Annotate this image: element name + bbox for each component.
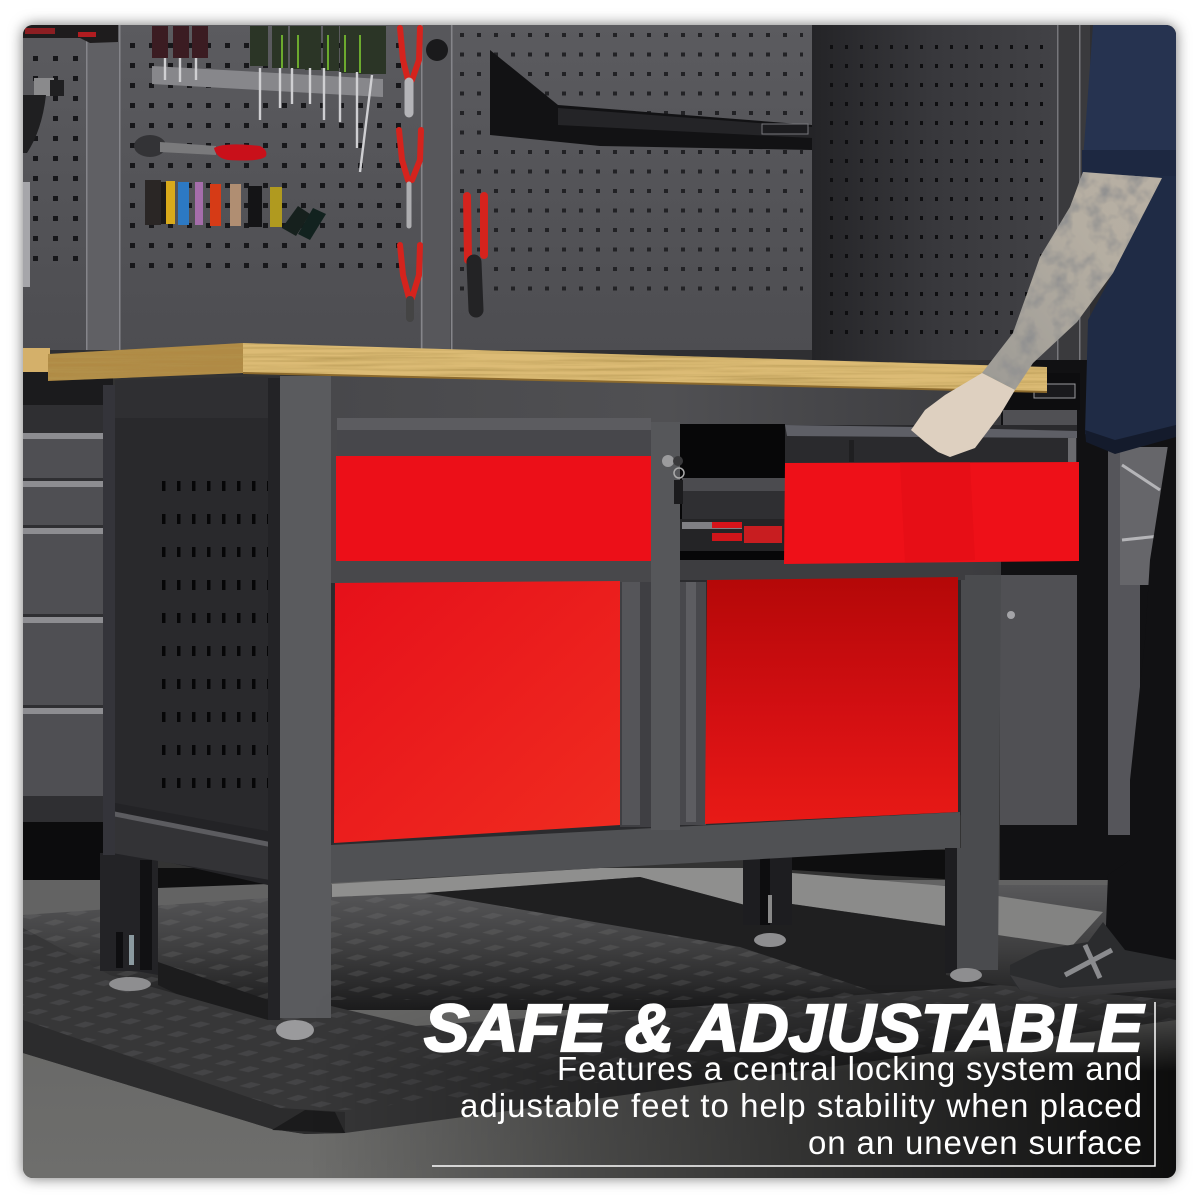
description: on an uneven surface (808, 1124, 1142, 1161)
front right leg (945, 575, 1001, 982)
navy shirt (1082, 25, 1176, 454)
bamboo worktop (48, 343, 1047, 392)
left cabinet door (334, 581, 651, 843)
dark mat behind bench (425, 877, 1010, 1000)
dark gradient behind caption (23, 985, 1176, 1178)
heading: SAFE & ADJUSTABLE (424, 991, 1145, 1066)
person (911, 25, 1176, 998)
lower rail below drawers (331, 558, 965, 583)
description (460, 1050, 1142, 1161)
description: adjustable feet to help stability when placed (460, 1087, 1142, 1124)
side counter wood (23, 348, 50, 372)
lock and keys (662, 455, 684, 504)
screwdriver rail and handles (152, 26, 386, 172)
ratchet (134, 135, 266, 160)
right cabinet door (680, 577, 958, 825)
open drawer cavity (680, 424, 785, 560)
shaded floor under bench (23, 885, 1176, 1010)
back foot (109, 977, 151, 991)
left tool cabinet (23, 372, 113, 882)
black trousers (1105, 445, 1176, 965)
pliers on wall (399, 28, 484, 318)
drawer band and cavity (331, 578, 965, 845)
bench front frame (331, 375, 1001, 580)
description: Features a central locking system and (557, 1050, 1142, 1087)
socket set (145, 180, 326, 240)
front left leg (268, 376, 331, 1040)
hand (911, 373, 1015, 457)
pale floor strips (332, 868, 745, 905)
tattooed forearm (982, 172, 1162, 390)
rubber floor mat (23, 928, 1176, 1134)
caption frame (432, 1002, 1155, 1166)
centre post (651, 578, 680, 828)
back wall with pegboards (23, 25, 1176, 375)
wall plug hole (426, 39, 448, 61)
left wall tools (23, 25, 118, 287)
caption (424, 991, 1155, 1166)
left drawer (336, 418, 651, 561)
bench left side frame (100, 385, 268, 975)
right back foot (743, 850, 792, 947)
pulled-out drawer (784, 410, 1079, 564)
right background cabinets (1000, 360, 1176, 910)
workbench (48, 343, 1079, 1040)
floor (23, 850, 1176, 1178)
bench side perforated panel (115, 418, 273, 832)
work shoe (1010, 922, 1176, 998)
bottom rail (331, 812, 960, 883)
wall shelf (490, 50, 812, 150)
